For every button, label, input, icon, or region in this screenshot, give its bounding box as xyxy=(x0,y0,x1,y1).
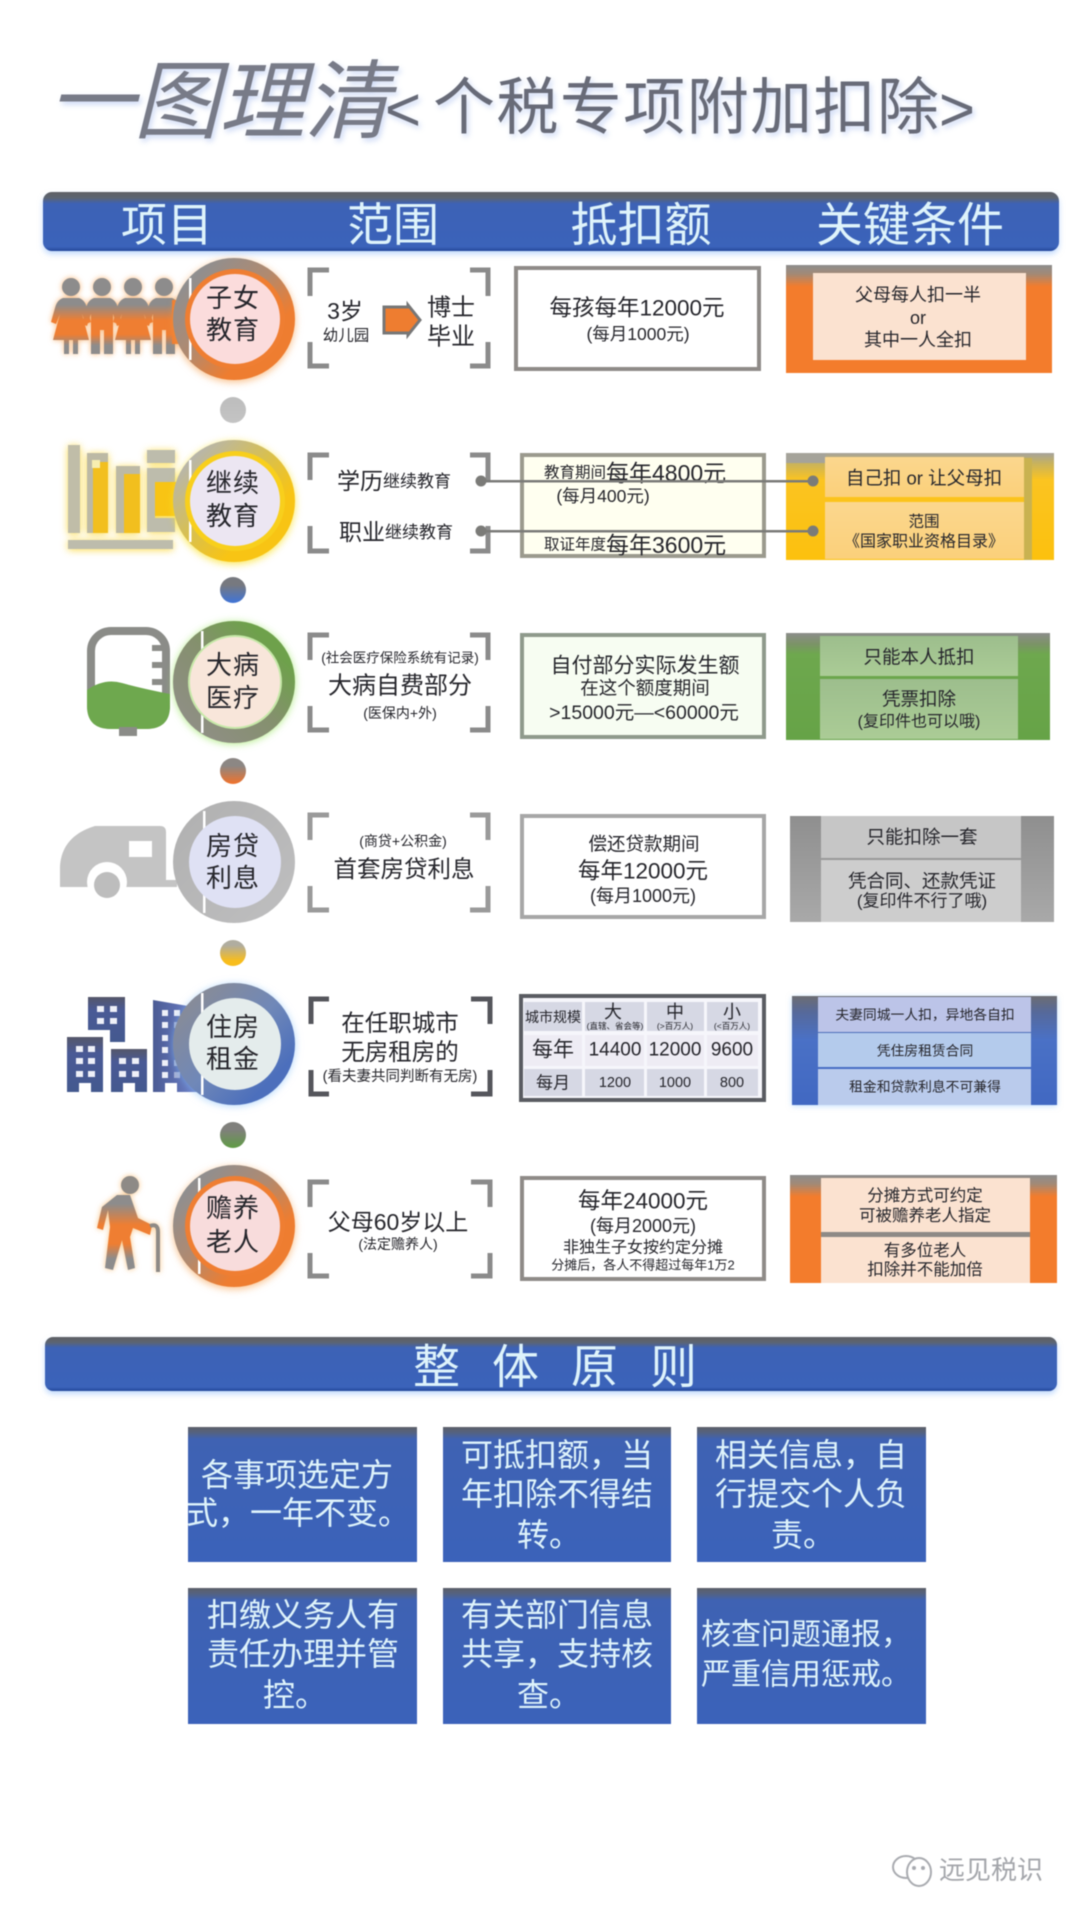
condition box: 租金和贷款利息不可兼得 xyxy=(849,1078,1001,1094)
scope bracket xyxy=(311,999,490,1094)
badge: 子女教育: 子女 xyxy=(206,283,260,313)
condition box xyxy=(786,265,1052,373)
condition box: 凭合同、还款凭证 xyxy=(848,870,996,892)
icon: children xyxy=(51,278,190,354)
scope bracket xyxy=(310,270,488,366)
condition box xyxy=(786,453,1054,560)
amount box xyxy=(522,816,764,917)
amount box: 自付部分实际发生额 xyxy=(550,654,740,678)
badge: 赡养老人 xyxy=(173,1165,295,1287)
icon: chat bubbles xyxy=(893,1856,931,1886)
scope bracket xyxy=(310,635,488,730)
badge: 赡养老人: 赡养 xyxy=(206,1193,260,1223)
scope bracket: (看夫妻共同判断有无房) xyxy=(323,1068,477,1085)
condition box: 有多位老人 xyxy=(884,1241,966,1260)
principle card 4 xyxy=(188,1588,417,1724)
rent table: 1200 xyxy=(599,1075,631,1091)
amount box: 取证年度每年3600元 xyxy=(544,532,726,558)
scope bracket: 毕业 xyxy=(427,324,475,350)
amount box: (每月2000元) xyxy=(590,1216,696,1236)
scope bracket xyxy=(310,455,488,551)
condition box: 凭住房租赁合同 xyxy=(877,1044,973,1058)
badge: 继续教育: 教育 xyxy=(206,501,260,531)
scope bracket: 学历继续教育 xyxy=(337,468,451,494)
scope bracket: 3岁 xyxy=(327,298,363,324)
badge: 房贷利息: 利息 xyxy=(206,863,260,893)
rent table: 每月 xyxy=(536,1074,570,1092)
rent table: 城市规模 xyxy=(525,1009,581,1025)
title subtitle part: 个税专项附加扣除 xyxy=(433,74,939,142)
amount box xyxy=(522,455,764,558)
amount box xyxy=(522,635,764,737)
badge: 继续教育: 继续 xyxy=(206,468,260,498)
principle card 1: 式，一年不变。 xyxy=(186,1495,410,1531)
scope bracket: 在任职城市 xyxy=(341,1010,459,1036)
rent table: 14400 xyxy=(589,1040,641,1060)
amount box xyxy=(522,1178,764,1279)
rent table: 800 xyxy=(720,1075,744,1091)
principle card 5 xyxy=(443,1588,671,1724)
condition box: (复印件也可以哦) xyxy=(858,712,980,730)
badge: 住房租金: 租金 xyxy=(206,1044,260,1074)
rent table: 大 xyxy=(604,1002,622,1022)
header bar: 抵扣额 xyxy=(570,198,712,252)
condition box: 可被赡养老人指定 xyxy=(859,1206,991,1225)
scope bracket: 父母60岁以上 xyxy=(328,1209,468,1235)
amount box: 分摊后，各人不得超过每年1万2 xyxy=(551,1258,735,1272)
principle card 3: 行提交个人负 xyxy=(715,1476,907,1512)
connector lines xyxy=(476,476,818,536)
amount box: 教育期间每年4800元 xyxy=(544,460,726,486)
rent table: 12000 xyxy=(649,1040,701,1060)
connector dot xyxy=(220,940,246,966)
badge: 大病医疗: 大病 xyxy=(206,650,260,680)
condition box xyxy=(792,996,1057,1105)
scope bracket: (商贷+公积金) xyxy=(359,833,447,849)
principle card 3: 相关信息，自 xyxy=(715,1437,907,1473)
condition box: 范围 xyxy=(908,512,940,530)
rent table: (直辖、省会等) xyxy=(587,1021,643,1031)
badge: 大病医疗: 医疗 xyxy=(206,683,260,713)
icon: buildings xyxy=(67,997,200,1092)
section bar: overall principles: 整体原则 xyxy=(413,1340,729,1394)
principle card 2 xyxy=(443,1427,671,1562)
scope bracket: (社会医疗保险系统有记录) xyxy=(321,650,479,666)
icon: medical bag xyxy=(87,631,170,736)
row 3: serious illness xyxy=(87,621,1050,743)
watermark: 远见税识 xyxy=(939,1855,1043,1885)
condition box xyxy=(790,1175,1057,1283)
scope bracket: 无房租房的 xyxy=(341,1039,459,1065)
principle card 2: 年扣除不得结 xyxy=(461,1476,653,1512)
condition box: 只能扣除一套 xyxy=(866,826,978,848)
scope bracket xyxy=(310,815,488,910)
badge: 房贷利息 xyxy=(173,801,295,923)
scope bracket: (医保内+外) xyxy=(363,705,437,721)
condition box: 自己扣 or 让父母扣 xyxy=(846,468,1002,488)
condition box: 分摊方式可约定 xyxy=(867,1186,983,1205)
condition box: or xyxy=(910,308,926,328)
watermark xyxy=(893,1855,1043,1886)
connector dot xyxy=(220,758,246,784)
row 4: mortgage interest xyxy=(60,801,1054,923)
condition box: 夫妻同城一人扣，异地各自扣 xyxy=(835,1008,1015,1022)
scope bracket: 大病自费部分 xyxy=(328,672,472,700)
badge: 住房租金 xyxy=(173,983,295,1105)
condition box: (复印件不行了哦) xyxy=(857,892,987,910)
principle card 6: 核查问题通报， xyxy=(701,1618,911,1652)
header bar xyxy=(43,192,1059,252)
amount box: 每年24000元 xyxy=(578,1188,708,1214)
amount box: 非独生子女按约定分摊 xyxy=(563,1238,723,1256)
principle card 6 xyxy=(697,1588,926,1724)
principle card 4: 控。 xyxy=(263,1677,327,1713)
arrow xyxy=(384,305,420,335)
badge: 继续教育 xyxy=(173,440,295,562)
condition box: 《国家职业资格目录》 xyxy=(844,532,1004,550)
condition box: 父母每人扣一半 xyxy=(855,285,981,305)
principle card 5: 共享，支持核 xyxy=(461,1636,653,1672)
badge: 大病医疗 xyxy=(173,621,295,743)
scope bracket: (法定赡养人) xyxy=(358,1236,438,1252)
condition box: 其中一人全扣 xyxy=(864,330,972,350)
rent table: 1000 xyxy=(659,1075,691,1091)
scope bracket: 职业继续教育 xyxy=(339,519,453,545)
scope bracket: 幼儿园 xyxy=(323,326,369,344)
principle card 1 xyxy=(186,1427,417,1562)
amount box: (每月1000元) xyxy=(586,324,690,344)
connector dot xyxy=(220,397,246,423)
row 6: elderly care xyxy=(97,1165,1057,1287)
condition box: 扣除并不能加倍 xyxy=(867,1260,983,1279)
amount box: >15000元—<60000元 xyxy=(549,702,739,724)
principle card 4: 责任办理并管 xyxy=(207,1636,399,1672)
scope bracket: 首套房贷利息 xyxy=(334,856,474,882)
title xyxy=(44,54,975,150)
title subtitle part: < xyxy=(385,76,421,144)
scope bracket xyxy=(310,1182,490,1276)
amount box: 每年12000元 xyxy=(578,858,708,884)
amount box: (每月400元) xyxy=(556,486,650,506)
rent table: 小 xyxy=(723,1002,741,1022)
condition box: 只能本人抵扣 xyxy=(863,646,975,668)
badge: 住房租金: 住房 xyxy=(206,1012,260,1042)
row 5: housing rent xyxy=(67,983,1057,1105)
principle card 2: 转。 xyxy=(517,1517,581,1553)
rent table: 中 xyxy=(666,1002,684,1022)
amount box: 在这个额度期间 xyxy=(580,678,710,698)
condition box xyxy=(790,816,1054,922)
icon: books xyxy=(68,445,191,549)
row 1: children education xyxy=(51,258,1052,380)
title italic part: 一图理清 xyxy=(44,54,410,150)
principle card 5: 有关部门信息 xyxy=(461,1597,653,1633)
badge: 赡养老人: 老人 xyxy=(206,1227,260,1257)
principle card 5: 查。 xyxy=(517,1677,581,1713)
header bar: 关键条件 xyxy=(816,198,1004,252)
icon: elder with cane xyxy=(97,1176,158,1272)
amount box: (每月1000元) xyxy=(590,886,696,906)
principle card 3 xyxy=(697,1427,926,1562)
rent table: (<百万人) xyxy=(714,1021,750,1031)
connector dot xyxy=(220,577,246,603)
amount box: 每孩每年12000元 xyxy=(549,296,725,320)
badge: 房贷利息: 房贷 xyxy=(206,831,260,861)
section bar: overall principles xyxy=(45,1337,1057,1394)
badge: 子女教育: 教育 xyxy=(206,315,260,345)
title subtitle part: > xyxy=(939,76,975,144)
amount box: 偿还贷款期间 xyxy=(588,834,700,854)
badge: 子女教育 xyxy=(173,258,295,380)
rent table: 每年 xyxy=(532,1038,574,1062)
scope bracket: 博士 xyxy=(427,294,475,322)
connector dot xyxy=(220,1122,246,1148)
condition box xyxy=(786,633,1050,740)
amount box xyxy=(516,268,759,369)
principle card 6: 严重信用惩戒。 xyxy=(701,1658,911,1692)
icon: trailer house xyxy=(60,826,177,902)
principle card 3: 责。 xyxy=(771,1517,835,1553)
principle card 4: 扣缴义务人有 xyxy=(207,1597,399,1633)
header bar: 项目 xyxy=(121,199,213,251)
rent table: 9600 xyxy=(711,1040,753,1060)
principle card 1: 各事项选定方 xyxy=(201,1457,393,1493)
rent table: (>百万人) xyxy=(657,1021,693,1031)
condition box: 凭票扣除 xyxy=(882,688,956,710)
rent table xyxy=(521,996,764,1100)
principle card 2: 可抵扣额，当 xyxy=(461,1437,653,1473)
header bar: 范围 xyxy=(347,199,439,251)
row 2: continuing education xyxy=(68,440,1054,562)
